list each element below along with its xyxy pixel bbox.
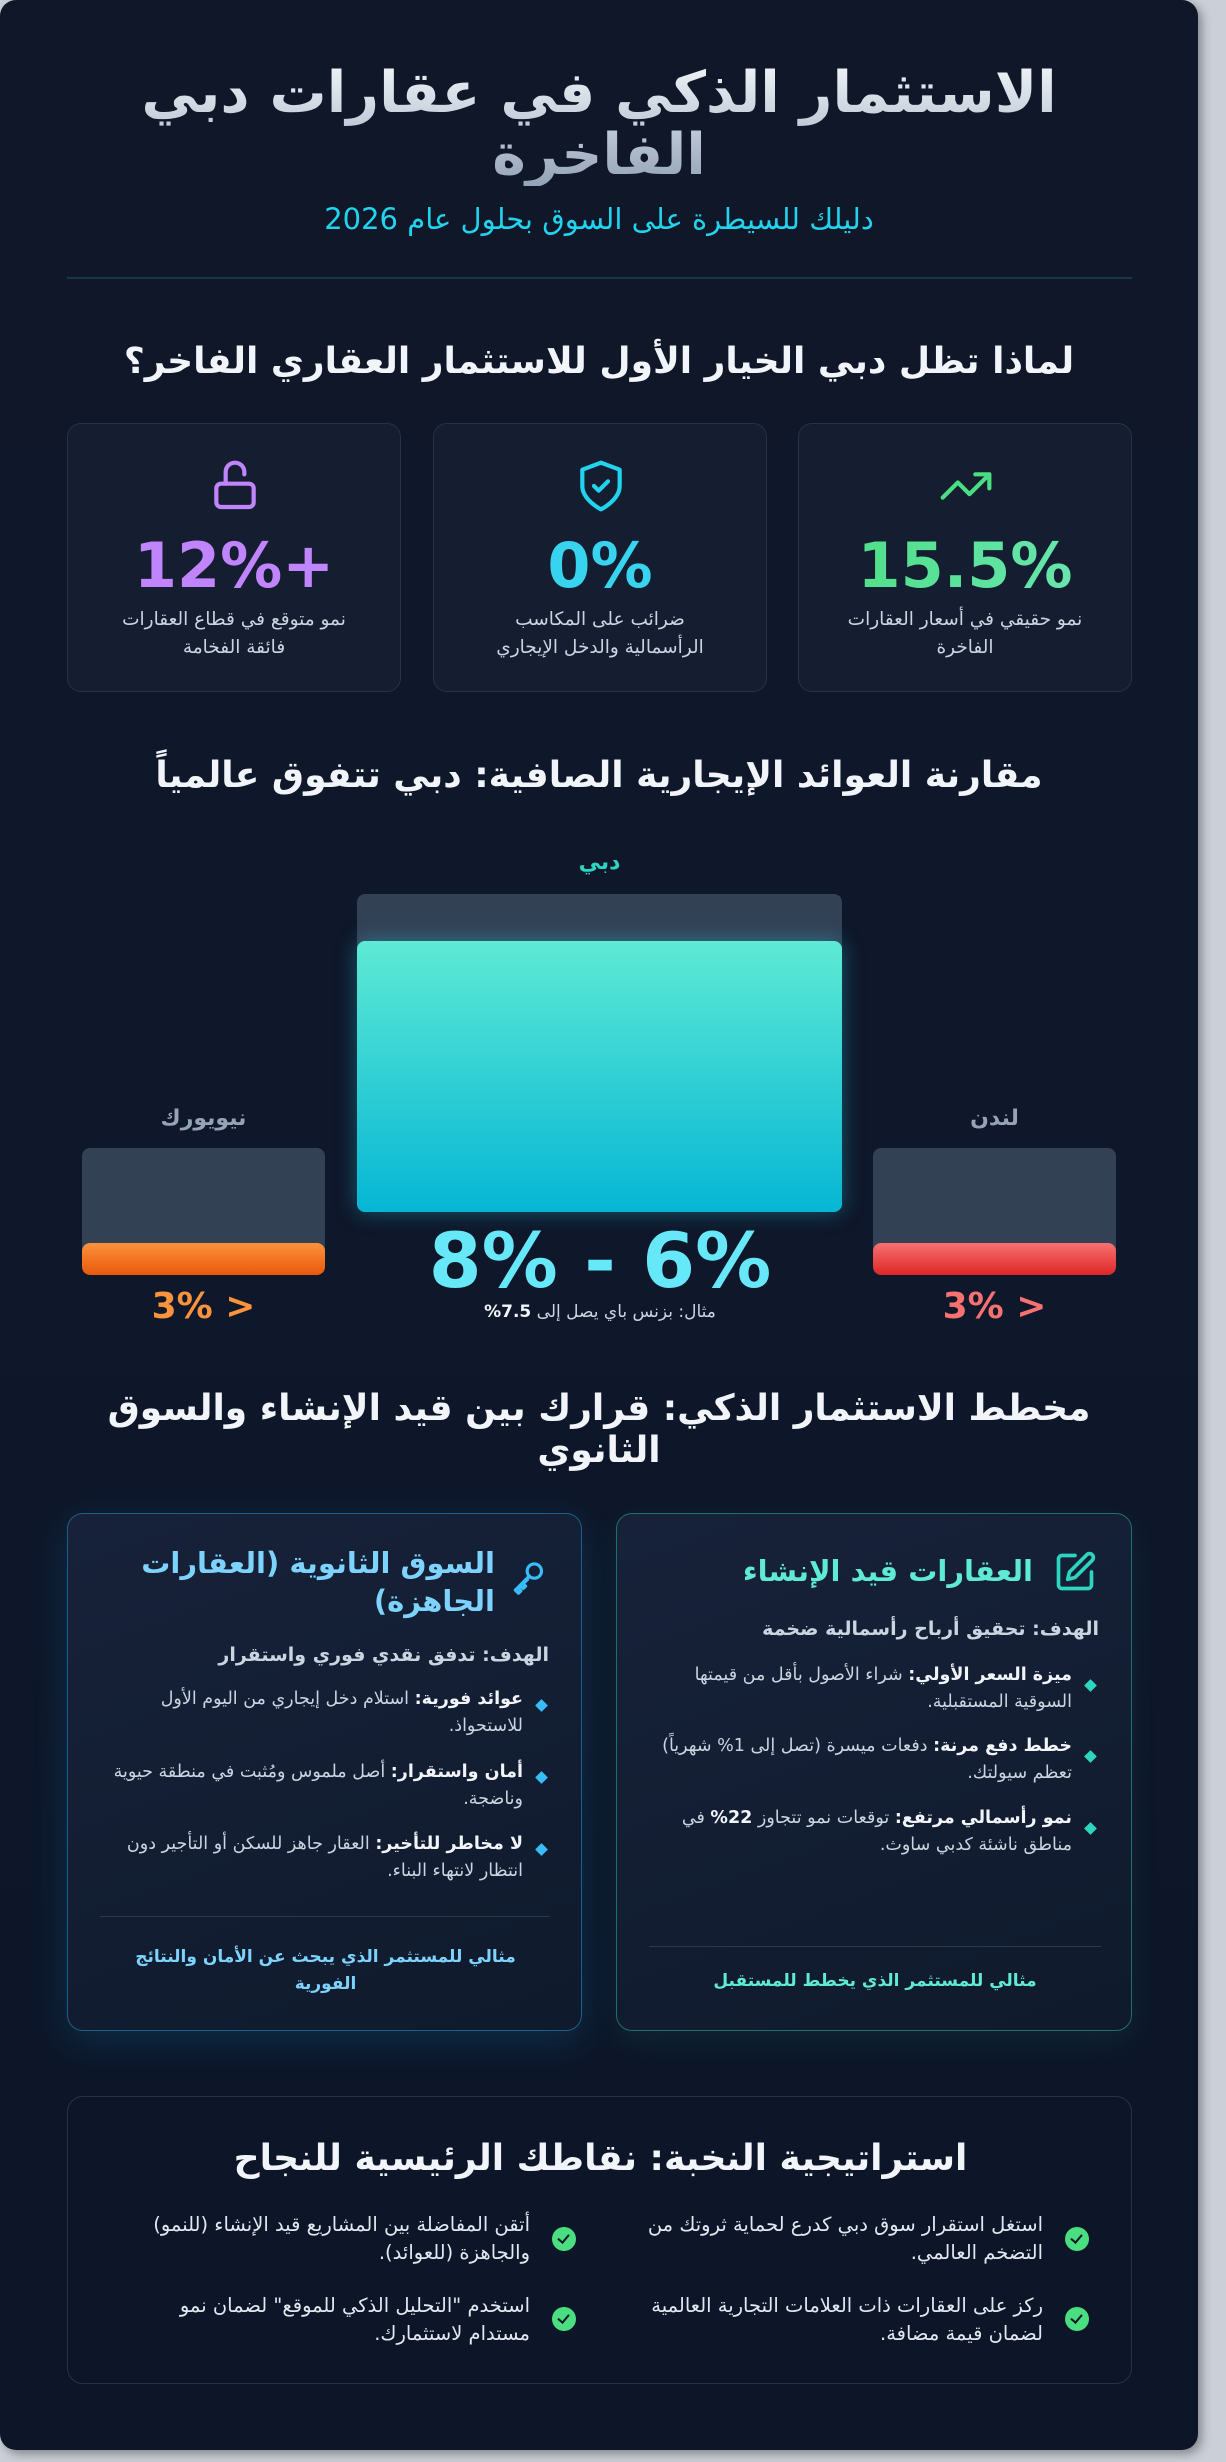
panel: off-plan: نمو رأسمالي مرتفع: توقعات نمو تتجاوز 22% في مناطق ناشئة كدبي ساوث.: [682, 1808, 1072, 1855]
panel: secondary market: عوائد فورية: استلام دخل إيجاري من اليوم الأول للاستحواذ.: [161, 1689, 523, 1736]
point 2: [552, 2227, 576, 2251]
heading: استراتيجية النخبة: نقاطك الرئيسية للنجاح: [234, 2138, 967, 2179]
panel: elite strategy: استخدم "التحليل الذكي للموقع" لضمان نمو مستدام لاستثمارك.: [180, 2294, 530, 2345]
stat number: 12%+: 12%+: [134, 529, 334, 602]
panel: elite strategy: أتقن المفاضلة بين المشاريع قيد الإنشاء (للنمو) والجاهزة (للعوائد).: [153, 2213, 530, 2264]
point 4: [552, 2307, 576, 2331]
goal: الهدف: تدفق نقدي فوري واستقرار: [218, 1644, 549, 1666]
label: new york: نيويورك: [161, 1106, 246, 1131]
bar: new york: [82, 1148, 325, 1275]
point 1: [1065, 2227, 1089, 2251]
footer: مثالي للمستثمر الذي يخطط للمستقبل: [713, 1971, 1037, 1991]
footer: [135, 1946, 516, 1994]
label: london: لندن: [970, 1106, 1019, 1131]
stat number: 0%: 0%: [547, 529, 653, 602]
label: dubai: دبي: [579, 850, 620, 875]
stat desc: [122, 609, 346, 658]
panel: secondary market: [67, 1513, 582, 2031]
bullet 2: [1084, 1750, 1097, 1763]
icon: key: [514, 1562, 543, 1595]
subtitle: دليلك للسيطرة على السوق بحلول عام 2026: [324, 202, 874, 236]
bullet 3: [1084, 1822, 1097, 1835]
title: الاستثمار الذكي في عقارات دبي: [141, 60, 1057, 126]
heading: blueprint: [108, 1388, 1090, 1471]
stat desc: الفاخرة: [936, 637, 994, 658]
panel: elite strategy: [67, 2096, 1132, 2384]
panel title: العقارات قيد الإنشاء: [743, 1554, 1033, 1588]
icon: pencil: [1056, 1552, 1096, 1590]
icon: shield: [580, 460, 622, 512]
stat desc: نمو متوقع في قطاع العقارات: [122, 609, 346, 630]
stat desc: ضرائب على المكاسب: [515, 609, 685, 630]
panel: elite strategy: استغل استقرار سوق دبي كدرع لحماية ثروتك من التضخم العالمي.: [648, 2213, 1043, 2264]
panel: off-plan: خطط دفع مرنة: دفعات ميسرة (تصل إلى 1% شهرياً) تعظم سيولتك.: [662, 1736, 1072, 1783]
footer: مثالي للمستثمر الذي يبحث عن الأمان والنتائج: [135, 1947, 516, 1967]
panel: secondary market: لا مخاطر للتأخير: العقار جاهز للسكن أو التأجير دون انتظار لانتهاء البناء.: [127, 1834, 523, 1881]
heading: blueprint: مخطط الاستثمار الذكي: قرارك بين قيد الإنشاء والسوق: [108, 1388, 1090, 1429]
stat desc: نمو حقيقي في أسعار العقارات: [848, 609, 1082, 630]
heading: blueprint: الثانوي: [537, 1430, 661, 1471]
title: [60, 62, 1138, 186]
bullet 1: [1084, 1679, 1097, 1692]
panel: secondary market: أمان واستقرار: أصل ملموس ومُثبت في منطقة حيوية وناضجة.: [114, 1762, 523, 1809]
bar: dubai: [357, 894, 842, 1212]
stat desc: [848, 606, 1082, 658]
goal: الهدف: تحقيق أرباح رأسمالية ضخمة: [762, 1618, 1099, 1640]
panel: elite strategy: ركز على العقارات ذات العلامات التجارية العالمية لضمان قيمة مضافة.: [651, 2294, 1043, 2345]
value: new york: < 3%: [152, 1286, 255, 1327]
title: الفاخرة: [492, 122, 706, 188]
footer: الفورية: [295, 1974, 356, 1994]
stat card: 0%: [433, 423, 767, 692]
panel: off-plan: [616, 1513, 1132, 2031]
icon: trending up: [940, 472, 992, 500]
heading: why dubai: لماذا تظل دبي الخيار الأول للاستثمار العقاري الفاخر؟: [124, 341, 1074, 382]
panel: off-plan: ميزة السعر الأولي: شراء الأصول بأقل من قيمتها السوقية المستقبلية.: [695, 1665, 1072, 1712]
value: london: < 3%: [943, 1286, 1046, 1327]
panel title: الجاهزة): [374, 1584, 495, 1618]
point 3: [1065, 2307, 1089, 2331]
stat desc: فائقة الفخامة: [183, 637, 285, 658]
heading: yields comparison: مقارنة العوائد الإيجارية الصافية: دبي تتفوق عالمياً: [155, 755, 1043, 796]
bullet 1: [535, 1699, 548, 1712]
value: dubai: 6% - 8%: [429, 1216, 771, 1305]
stat desc: الرأسمالية والدخل الإيجاري: [496, 637, 704, 658]
panel title: [141, 1546, 495, 1618]
chart: rental yields: [82, 850, 1116, 1327]
bar: london: [873, 1148, 1116, 1275]
stat number: 15.5%: [798, 526, 1132, 606]
note: business bay: مثال: بزنس باي يصل إلى 7.5%: [484, 1302, 716, 1322]
stat card: 12%+: [67, 423, 401, 692]
bullet 2: [535, 1771, 548, 1784]
stat number: 15.5%: 15.5%: [857, 529, 1073, 602]
panel title: السوق الثانوية (العقارات: [141, 1546, 495, 1580]
stat desc: [496, 609, 704, 658]
icon: lock: [214, 460, 256, 510]
stat card: 15.5%: [798, 423, 1132, 692]
bullet 3: [535, 1843, 548, 1856]
